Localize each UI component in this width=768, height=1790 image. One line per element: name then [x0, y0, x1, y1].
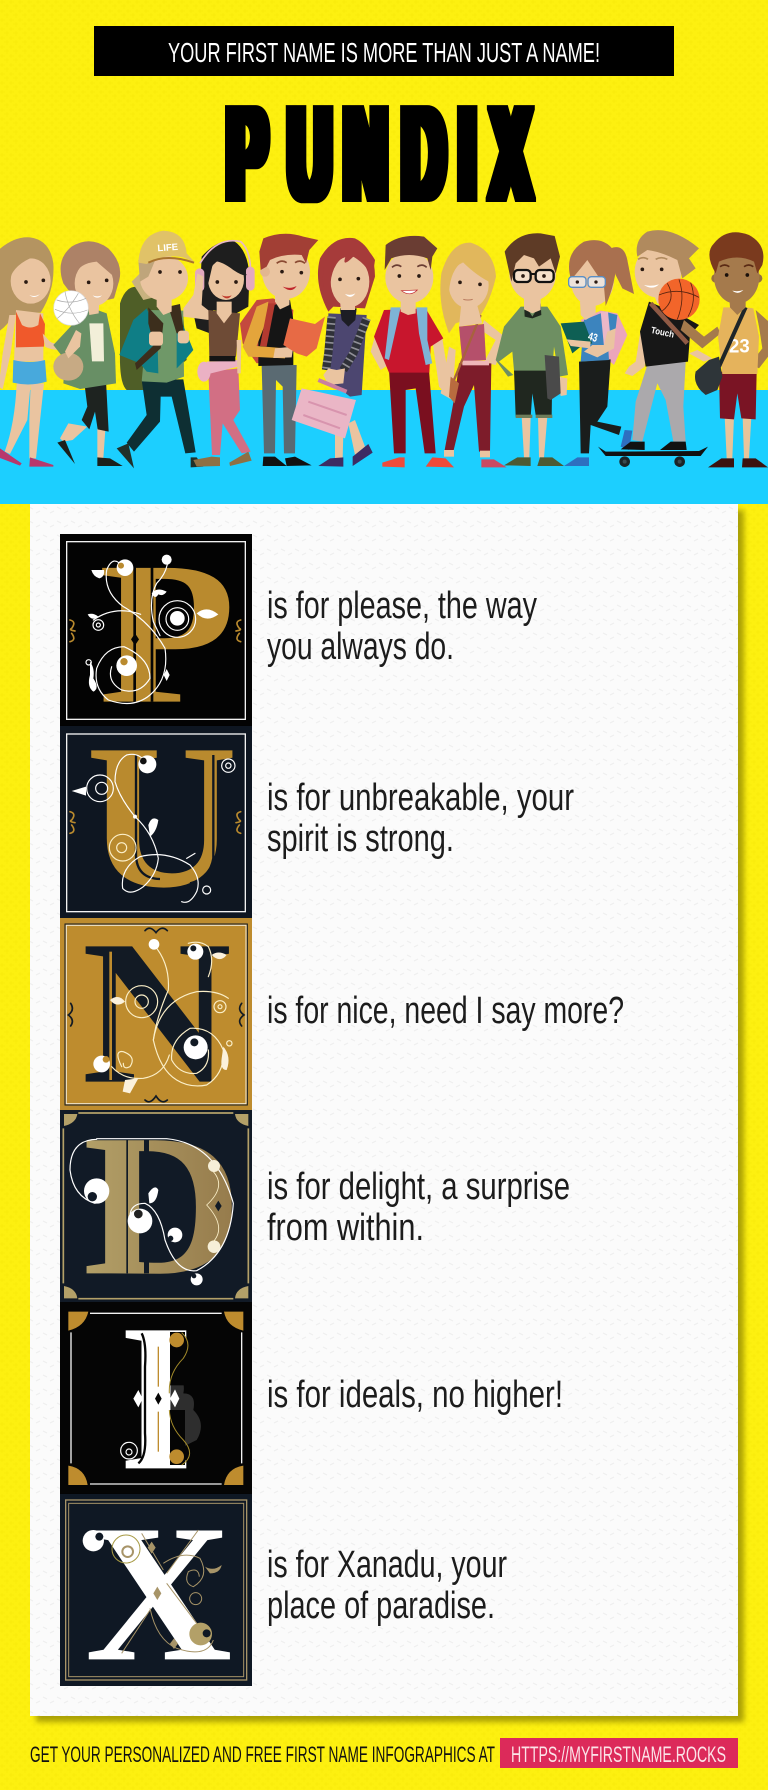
text: P: is for please, the way	[267, 585, 537, 627]
text: X: place of paradise.	[267, 1585, 495, 1627]
text: D: is for delight, a surprise	[267, 1166, 570, 1208]
text: U: spirit is strong.	[267, 818, 454, 860]
person 9: boy with glasses and laptop	[496, 233, 568, 466]
tile: letter X: X	[85, 1484, 232, 1702]
people: left six	[0, 231, 375, 468]
letter tiles: P and U	[60, 521, 252, 931]
tile: letter D: D	[83, 1092, 243, 1317]
text: D	[267, 1166, 570, 1249]
people: right six	[371, 230, 768, 467]
title: PUNDIX: PUNDIX	[227, 80, 531, 230]
tile: letter N: N	[82, 898, 232, 1127]
text: U	[267, 777, 574, 860]
text: X: is for Xanadu, your	[267, 1544, 507, 1586]
person 4: girl with headphones	[183, 241, 255, 467]
person 12: boy in tank top with shoulder bag: 23	[729, 337, 750, 358]
tile: letter P	[60, 521, 252, 747]
tile: letter I	[60, 1280, 252, 1514]
person 2: girl with volleyball	[53, 241, 123, 466]
person 8: blonde girl	[440, 243, 507, 467]
tile: letter U: U	[86, 702, 238, 931]
text: I: is for ideals, no higher!	[267, 1374, 563, 1416]
white content panel	[30, 504, 744, 1722]
letter tiles: I and X	[60, 1280, 252, 1702]
text: X	[267, 1544, 507, 1627]
text: P: you always do.	[267, 626, 454, 668]
letter tiles: N and D	[60, 898, 252, 1317]
person 10: girl with ponytail and tablet: 43	[587, 331, 599, 345]
person 6: girl with pink case	[292, 238, 375, 467]
person 1: girl in orange top	[0, 237, 81, 467]
footer call to action: GET YOUR PERSONALIZED AND FREE FIRST NAME INFOGRAPHICS AT	[30, 1742, 495, 1767]
text: N: is for nice, need I say more?	[267, 990, 624, 1032]
tile: letter P: P	[98, 521, 236, 747]
person 11: skater with basketball	[598, 230, 721, 467]
blue floor band	[0, 390, 768, 504]
text: U: is for unbreakable, your	[267, 777, 574, 819]
person 10: girl with ponytail and tablet	[561, 240, 634, 466]
illustration: group of young people	[0, 230, 768, 468]
person 7: boy in red shirt	[371, 236, 454, 467]
person 12: boy in tank top with shoulder bag	[695, 232, 768, 467]
tile: letter I: I	[119, 1280, 193, 1514]
text: P	[267, 585, 537, 668]
person 3: boy with cap and backpack: LIFE	[157, 242, 178, 253]
person 11: skater with basketball: Touch	[650, 325, 675, 340]
person 5: boy reading a book	[240, 234, 325, 466]
person 3: boy with cap and backpack	[117, 231, 203, 468]
top banner	[94, 26, 674, 76]
text: D: from within.	[267, 1207, 424, 1249]
